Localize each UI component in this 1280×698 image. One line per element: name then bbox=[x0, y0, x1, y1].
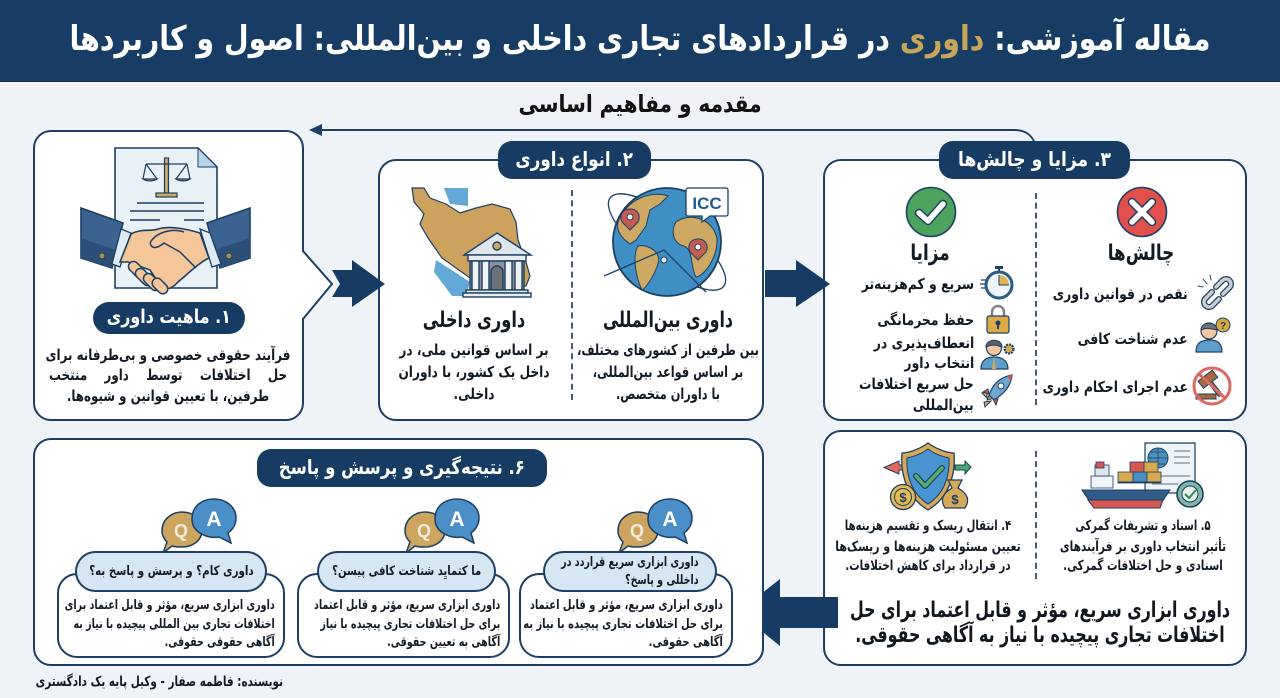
text: customs documents: اسنادی و حل اختلافات گمرکی. bbox=[1063, 558, 1223, 574]
heading: advantages: مزایا bbox=[910, 241, 950, 266]
icon: prohibited gavel bbox=[1192, 366, 1232, 406]
text: domestic: داخلی. bbox=[453, 385, 495, 403]
answer text: آگاهی به تعیین حقوقی. bbox=[387, 635, 500, 650]
text: domestic: داخل یک کشور، با داوران bbox=[398, 363, 550, 381]
challenge items bbox=[1043, 274, 1234, 406]
text: domestic: بر اساس قوانین ملی، در bbox=[399, 341, 549, 359]
icon: shield with coins: $ bbox=[899, 490, 907, 505]
answer text: داوری ابزاری سریع، مؤثر و قابل اعتماد bbox=[530, 598, 723, 613]
heading: international: داوری بین‌المللی bbox=[603, 308, 733, 333]
answer text: آگاهی حقوقی حقوقی. bbox=[165, 635, 275, 650]
icon: Q and A bubbles bbox=[161, 498, 237, 551]
text: international: بین طرفین از کشورهای مختلف، bbox=[577, 341, 759, 359]
icon: red cross bbox=[1116, 186, 1168, 238]
answer card bbox=[297, 573, 510, 658]
icon: Q and A bubbles: A bbox=[662, 508, 678, 531]
icon: stopwatch bbox=[980, 266, 1014, 300]
divider bbox=[1035, 193, 1037, 405]
icon: globe with ICC: ICC bbox=[692, 194, 722, 213]
icon: shield with coins: $ bbox=[951, 492, 959, 507]
icon: Q and A bubbles: A bbox=[449, 508, 465, 531]
item: flexibility bbox=[873, 334, 974, 372]
icon: confused person bbox=[1195, 318, 1230, 353]
column: international arbitration bbox=[577, 308, 759, 403]
pill heading: 2: ۲. انواع داوری bbox=[516, 147, 633, 171]
question bubble: داوری ابزاری سریع قراردد در bbox=[561, 554, 699, 570]
pill heading: 1: ۱. ماهیت داوری bbox=[107, 306, 231, 328]
icon: broken chain bbox=[1198, 274, 1234, 310]
pill heading: 3: ۳. مزایا و چالش‌ها bbox=[958, 147, 1111, 171]
answer text: برای حل اختلافات تجاری پیچیده با نیاز bbox=[320, 616, 500, 632]
text: customs documents bbox=[1060, 517, 1226, 574]
advantage items bbox=[859, 266, 1015, 414]
icon: green check bbox=[906, 186, 956, 238]
pill heading: 6 bbox=[257, 449, 547, 487]
divider bbox=[1035, 451, 1037, 579]
text: definition: فرآیند حقوقی خصوصی و بی‌طرفانه برای bbox=[46, 346, 290, 364]
Q&A card: left bbox=[57, 498, 285, 658]
icon: Q and A bubbles bbox=[404, 498, 480, 551]
heading: domestic: داوری داخلی bbox=[423, 308, 525, 333]
pill heading: 3 bbox=[939, 141, 1130, 179]
icon: Q and A bubbles bbox=[617, 498, 693, 551]
panel 6: conclusion and Q&A bbox=[33, 438, 764, 666]
icon: Q and A bubbles: A bbox=[206, 508, 222, 531]
item: quick resolution: حل سریع اختلافات bbox=[859, 375, 974, 393]
item: flexibility: انتخاب داور bbox=[904, 354, 974, 372]
icon: globe with ICC bbox=[604, 187, 729, 297]
text: risk transfer bbox=[835, 518, 1021, 574]
text: domestic bbox=[398, 341, 550, 403]
arrow: panel 1 to panel 2 bbox=[302, 250, 385, 320]
question bubble bbox=[317, 551, 496, 592]
answer card bbox=[57, 573, 285, 658]
text: customs documents: ۵. اسناد و تشریفات گمرکی bbox=[1075, 518, 1211, 534]
text: international bbox=[577, 341, 759, 403]
answer text: آگاهی حقوقی. bbox=[649, 635, 723, 650]
section heading: مقدمه و مفاهیم اساسی bbox=[518, 90, 762, 118]
divider bbox=[571, 190, 573, 400]
arrow: return line from panel 3 to panel 1 bbox=[309, 124, 1035, 141]
column: domestic arbitration bbox=[398, 308, 550, 403]
item: fast and cheap: سریع و کم‌هزینه‌تر bbox=[862, 275, 974, 293]
panel 2: types of arbitration bbox=[378, 159, 764, 421]
item: confidentiality: حفظ محرمانگی bbox=[877, 311, 974, 329]
arrow: panel 5 to panel 6 bbox=[764, 579, 838, 646]
Q&A card: middle bbox=[297, 498, 510, 658]
text: definition: حل اختلافات توسط داور منتخب bbox=[49, 366, 287, 384]
icon: ship with customs document bbox=[1081, 442, 1204, 508]
text: risk transfer: در قرارداد برای کاهش اختلافات. bbox=[845, 558, 1011, 574]
item: non-enforcement: عدم اجرای احکام داوری bbox=[1043, 378, 1188, 396]
icon: Q and A bubbles: Q bbox=[174, 521, 188, 541]
text: customs documents: تأثیر انتخاب داوری بر فرآیندهای bbox=[1060, 539, 1226, 555]
answer text bbox=[314, 598, 500, 650]
icon: padlock bbox=[986, 304, 1010, 334]
icon: rocket bbox=[981, 374, 1013, 408]
text: definition bbox=[46, 346, 290, 405]
answer text: اختلافات تجاری بین المللی پیچیده با نیاز به bbox=[74, 616, 275, 632]
key message: داوری ابزاری سریع، مؤثر و قابل اعتماد برای حل bbox=[850, 598, 1230, 623]
answer text: داوری ابزاری سریع، مؤثر و قابل اعتماد bbox=[314, 598, 500, 613]
icon: Q and A bubbles: Q bbox=[630, 521, 644, 541]
question bubble: داخللی و پاسخ؟ bbox=[625, 572, 699, 588]
footer: author: نویسنده: فاطمه صفار - وکیل پایه یک دادگستری bbox=[36, 674, 283, 690]
icon: shield with coins bbox=[882, 442, 972, 511]
text: risk transfer: تعیین مسئولیت هزینه‌ها و ریسک‌ها bbox=[835, 539, 1021, 555]
icon: contract and handshake bbox=[80, 146, 251, 295]
item: quick resolution bbox=[859, 375, 974, 414]
answer text: برای حل اختلافات تجاری پیچیده با نیاز به bbox=[523, 616, 723, 632]
pill heading: 6: ۶. نتیجه‌گیری و پرسش و پاسخ bbox=[279, 455, 525, 479]
icon: Q and A bubbles: Q bbox=[417, 521, 431, 541]
question bubble bbox=[75, 551, 267, 592]
text: definition: طرفین، با تعیین قوانین و شیوه‌ها. bbox=[67, 387, 269, 405]
title: مقاله آموزشی: داوری در قراردادهای تجاری داخلی و بین‌المللی: اصول و کاربردها bbox=[69, 19, 1211, 59]
panel 1: nature of arbitration bbox=[33, 130, 304, 421]
arrow: panel 2 to panel 3 bbox=[765, 260, 830, 307]
icon: person with gear bbox=[980, 340, 1015, 370]
key message bbox=[850, 598, 1230, 648]
text: risk transfer: ۴. انتقال ریسک و تقسیم هزینه‌ها bbox=[845, 518, 1011, 534]
key message: اختلافات تجاری پیچیده با نیاز به آگاهی حقوقی. bbox=[855, 623, 1225, 648]
answer text bbox=[523, 598, 724, 650]
question bubble bbox=[543, 551, 717, 592]
answer text bbox=[65, 598, 275, 650]
answer card bbox=[519, 573, 733, 658]
item: flexibility: انعطاف‌پذیری در bbox=[873, 334, 974, 352]
item: quick resolution: بین‌المللی bbox=[913, 396, 974, 414]
answer text: داوری ابزاری سریع، مؤثر و قابل اعتماد برای bbox=[65, 598, 275, 613]
icon: Iran map with courthouse bbox=[411, 187, 534, 298]
text: international: با داوران متخصص. bbox=[616, 385, 720, 403]
heading: challenges: چالش‌ها bbox=[1108, 241, 1174, 266]
pill heading: 1 bbox=[93, 302, 245, 334]
header banner bbox=[0, 0, 1280, 82]
question bubble: ما کتمایِد شناخت کافی پیسن؟ bbox=[332, 564, 481, 578]
Q&A card: right bbox=[519, 498, 733, 658]
question bubble: داوری کام؟ و پرسش و پاسخ به؟ bbox=[89, 564, 253, 578]
panel 4-5: risk, customs and key message bbox=[823, 430, 1247, 666]
text: international: بر اساس قواعد بین‌المللی، bbox=[593, 363, 743, 381]
panel 3: advantages and challenges bbox=[823, 159, 1247, 421]
pill heading: 2 bbox=[498, 141, 651, 179]
icon: confused person: ? bbox=[1220, 321, 1226, 332]
item: legal gaps: نقص در قوانین داوری bbox=[1053, 285, 1188, 303]
item: insufficient knowledge: عدم شناخت کافی bbox=[1078, 330, 1188, 348]
